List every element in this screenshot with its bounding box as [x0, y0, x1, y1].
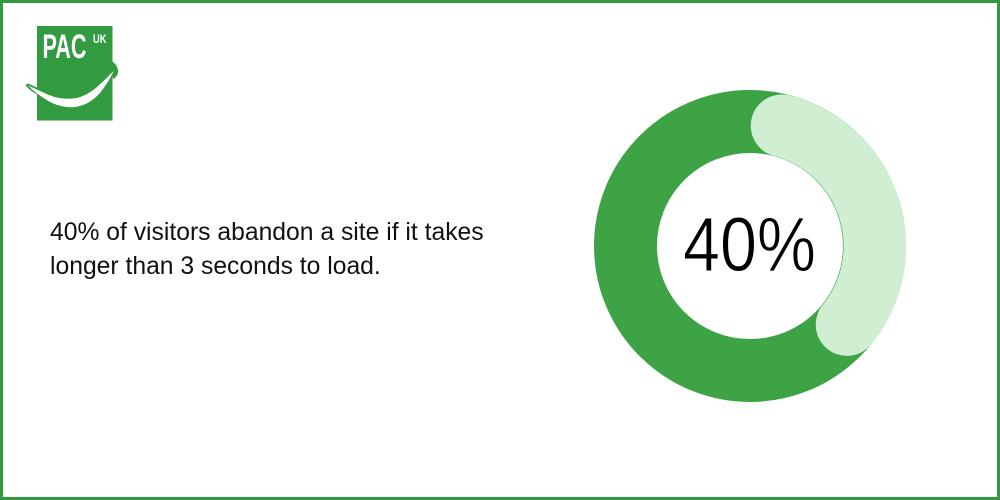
donut center value: 40% — [683, 202, 816, 288]
donut highlight arc 40% — [782, 126, 875, 325]
body text: longer than 3 seconds to load. — [50, 252, 381, 280]
logo smile right leaf — [112, 61, 118, 79]
donut base ring — [626, 122, 874, 370]
logo smile left outline — [26, 84, 38, 95]
donut chart — [626, 122, 875, 370]
body text: 40% of visitors abandon a site if it takes — [50, 218, 484, 246]
logo smile white — [28, 71, 114, 107]
body text — [50, 218, 484, 280]
logo green square — [37, 26, 112, 120]
logo wordmark PAC: PAC — [42, 28, 86, 66]
logo wordmark UK: UK — [93, 32, 107, 46]
logo: PAC UK — [26, 26, 118, 120]
